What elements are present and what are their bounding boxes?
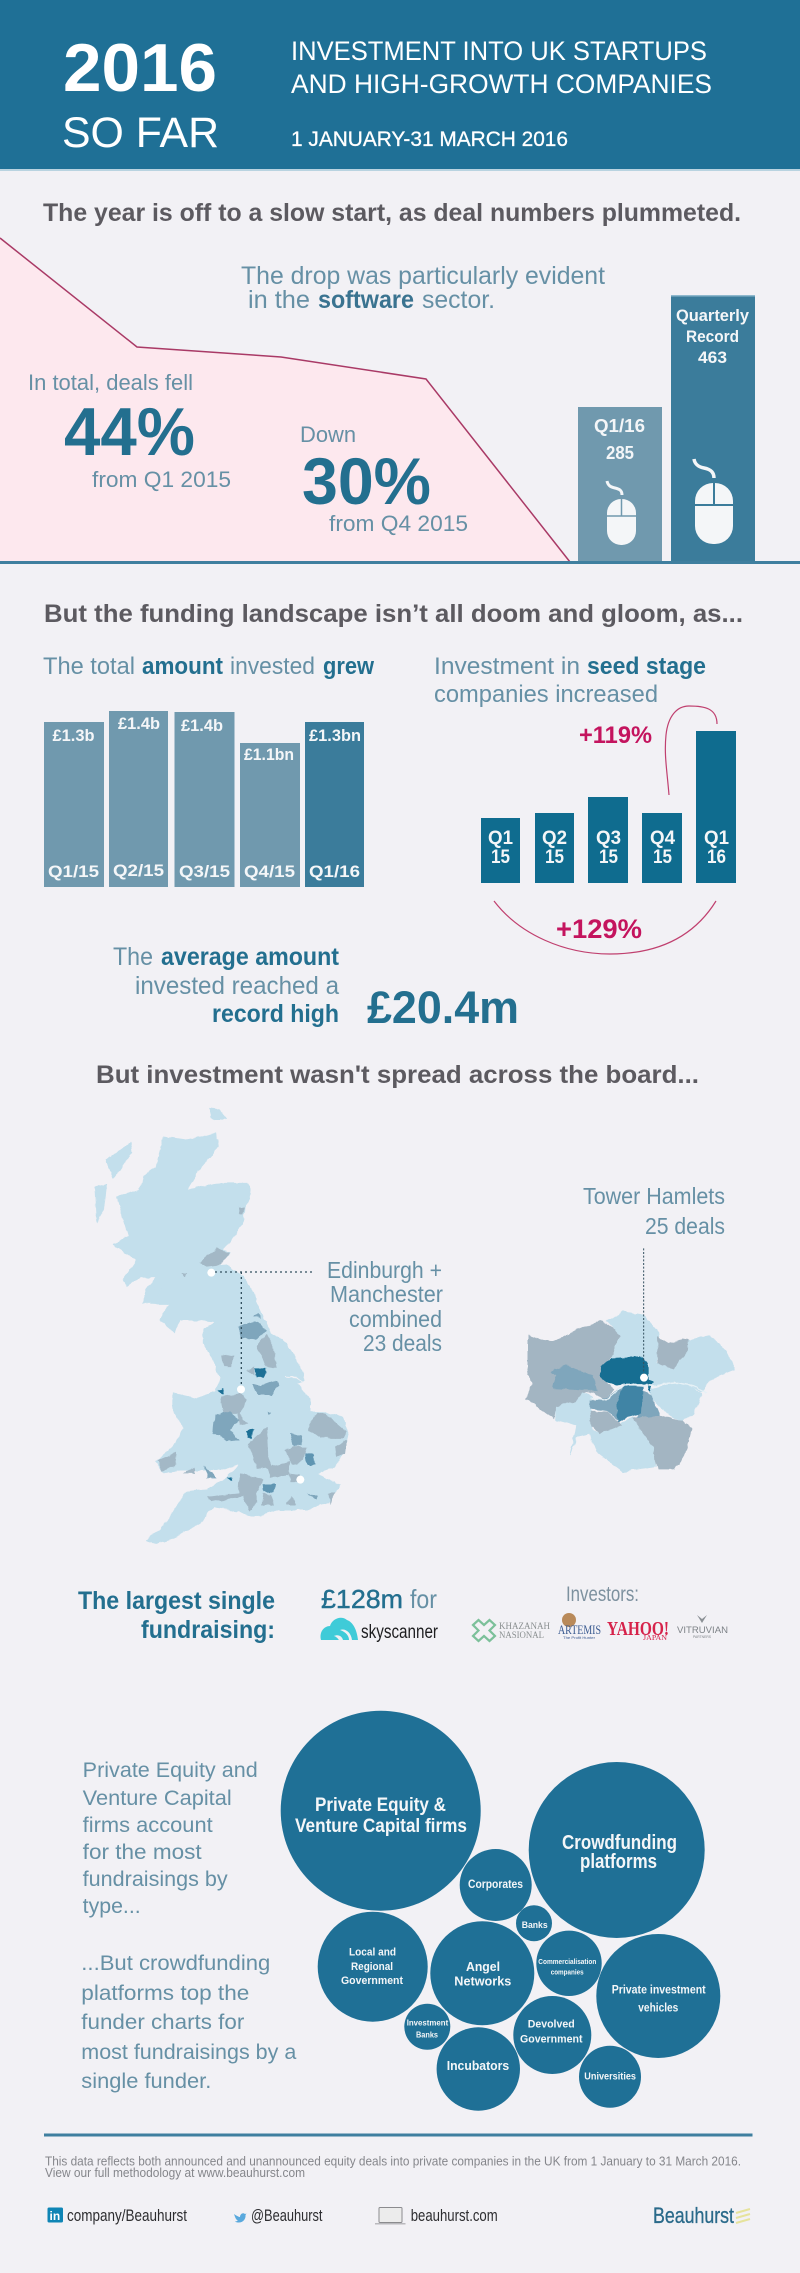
footer rule: [44, 2134, 752, 2136]
arrow: +119% growth curve: [579, 706, 717, 795]
arrow: +119% growth curve: +119%: [579, 722, 652, 749]
bubble labels: Regional: [351, 1961, 393, 1973]
bar chart: amount invested: £1.1bn: [244, 745, 294, 764]
logo: skyscanner: skyscanner: [361, 1622, 439, 1643]
text: private equity and crowdfunding explanation: for the most: [83, 1841, 202, 1864]
bar chart: seed stage: Q1: [488, 828, 513, 849]
header banner: [0, 0, 800, 171]
logo: Khazanah Nasional: KHAZANAH: [499, 1622, 550, 1632]
bubble labels: Government: [520, 2033, 583, 2045]
heading: funding landscape: But the funding landscape isn’t all doom and gloom, as...: [44, 600, 743, 628]
title: 2016 so far: [62, 30, 219, 157]
bar chart: seed stage: 16: [707, 847, 726, 868]
callout: deals fell 44%: from Q1 2015: [92, 467, 231, 492]
text: largest single fundraising: fundraising:: [141, 1616, 275, 1644]
bar chart: seed stage: [481, 731, 736, 883]
bubble labels: companies: [551, 1967, 584, 1976]
bubble labels: Private investment: [612, 1984, 706, 1996]
callout: down 30%: from Q4 2015: [329, 511, 468, 536]
social: Twitter: @Beauhurst: [251, 2206, 323, 2225]
heading: investment spread: But investment wasn't spread across the board...: [96, 1061, 699, 1089]
bar: quarterly record: Quarterly: [676, 306, 750, 325]
text: seed stage increased: [434, 653, 706, 708]
text: software drop: sector.: [422, 286, 495, 314]
social: LinkedIn: in: [50, 2209, 60, 2223]
bar: quarterly record: [671, 295, 755, 561]
bar chart: amount invested: Q4/15: [244, 862, 295, 881]
label: Edinburgh and Manchester: [327, 1257, 443, 1356]
text: total amount invested grew: grew: [323, 653, 374, 680]
bubble labels: platforms: [580, 1851, 657, 1873]
text: software drop: The drop was particularly evident: [241, 262, 605, 290]
bar chart: amount invested: Q3/15: [179, 862, 230, 881]
bubble labels: Corporates: [468, 1879, 523, 1891]
text: private equity and crowdfunding explanation: most fundraisings by a: [81, 2041, 297, 2064]
subtitle: AND HIGH-GROWTH COMPANIES: [291, 69, 712, 99]
text: £128m for: [321, 1584, 437, 1614]
label: Tower Hamlets: Tower Hamlets: [583, 1183, 725, 1209]
bubble labels: Incubators: [447, 2059, 509, 2073]
arrow: +129% growth curve: [494, 901, 716, 954]
logo: Artemis: The Profit Hunter: [563, 1635, 596, 1640]
text: total amount invested grew: [43, 653, 374, 680]
callout: average amount record high: invested reached a: [135, 972, 339, 1000]
label: Tower Hamlets: [583, 1183, 725, 1239]
callout: average amount record high: [113, 943, 519, 1033]
bar chart: seed stage: 15: [599, 847, 618, 868]
text: seed stage increased: companies increased: [434, 681, 658, 708]
chart: falling deal numbers area: [0, 238, 800, 564]
social: Twitter: [234, 2206, 323, 2225]
callout: average amount record high: average amount: [161, 943, 340, 971]
icon: mouse large: [694, 459, 733, 544]
logo: Vitruvian: VITRUVIAN: [677, 1625, 728, 1636]
text: seed stage increased: Investment in: [434, 653, 580, 680]
icon: mouse small: [607, 481, 636, 545]
bubble labels: Venture Capital firms: [295, 1816, 467, 1837]
logo: Beauhurst: Beauhurst: [653, 2203, 734, 2228]
map: United Kingdom: [95, 1108, 348, 1543]
bar chart: seed stage: Q4: [650, 828, 675, 849]
text: software drop: software: [318, 286, 414, 314]
title: 2016 so far: SO FAR: [62, 109, 219, 157]
callout: deals fell 44%: [28, 370, 231, 492]
text: methodology note: [45, 2154, 741, 2180]
bubble chart: funders: [281, 1711, 720, 2111]
bar chart: amount invested: [44, 711, 364, 887]
bar: Q1/16 software deals: [578, 407, 662, 561]
bubble labels: Universities: [584, 2071, 636, 2082]
text: private equity and crowdfunding explanation: [81, 1759, 297, 2093]
label: Edinburgh and Manchester: combined: [349, 1306, 442, 1332]
bar chart: seed stage: 15: [545, 847, 564, 868]
text: total amount invested grew: invested: [230, 653, 315, 680]
text: total amount invested grew: The total: [43, 653, 135, 680]
arrow: +129% growth curve: +129%: [556, 914, 642, 944]
logo: Khazanah Nasional: [473, 1620, 550, 1641]
bubble labels: Crowdfunding: [562, 1832, 677, 1854]
logo: Artemis: [558, 1613, 601, 1640]
bar chart: amount invested: Q2/15: [113, 861, 164, 880]
label: Edinburgh and Manchester: 23 deals: [363, 1330, 442, 1356]
bar chart: amount invested: £1.3bn: [309, 726, 361, 745]
bar chart: seed stage: Q1: [704, 828, 729, 849]
bubble labels: Commercialisation: [538, 1957, 597, 1966]
bubble labels: [295, 1795, 706, 2082]
heading: slow start: The year is off to a slow start, as deal numbers plummeted.: [43, 199, 741, 227]
bar: Q1/16 software deals: Q1/16: [594, 416, 645, 436]
bubble labels: vehicles: [638, 2003, 678, 2015]
callout: average amount record high: The: [113, 943, 153, 971]
bar chart: amount invested: £1.3b: [52, 726, 94, 745]
text: largest single fundraising: [78, 1587, 275, 1644]
callout: average amount record high: £20.4m: [367, 982, 519, 1033]
text: methodology note: This data reflects both announced and unannounced equity deals into private companies in the UK from 1 January to 31 March 2016.: [45, 2154, 741, 2169]
text: private equity and crowdfunding explanation: funder charts for: [81, 2011, 244, 2034]
bubble labels: Investment: [407, 2018, 449, 2027]
text: private equity and crowdfunding explanation: Private Equity and: [83, 1759, 258, 1782]
callout: deals fell 44%: 44%: [64, 394, 195, 470]
bubble labels: Devolved: [528, 2019, 575, 2031]
text: software drop: in the: [248, 286, 310, 314]
text: investors: Investors:: [566, 1583, 639, 1606]
bar chart: amount invested: £1.4b: [181, 716, 223, 735]
text: private equity and crowdfunding explanation: single funder.: [81, 2070, 211, 2093]
label: Edinburgh and Manchester: Manchester: [330, 1281, 443, 1307]
logo: Yahoo Japan: YAHOO!: [607, 1618, 669, 1640]
label: Edinburgh and Manchester: Edinburgh +: [327, 1257, 442, 1283]
bubble labels: Local and: [349, 1947, 396, 1959]
logo: skyscanner: [321, 1618, 439, 1643]
callout: down 30%: [300, 422, 468, 536]
social: LinkedIn: company/Beauhurst: [67, 2206, 187, 2225]
text: private equity and crowdfunding explanation: type...: [83, 1895, 141, 1918]
callout: deals fell 44%: In total, deals fell: [28, 370, 193, 395]
bar chart: amount invested: Q1/16: [309, 862, 360, 881]
title: 2016 so far: 2016: [63, 30, 217, 106]
text: private equity and crowdfunding explanation: Venture Capital: [83, 1787, 232, 1810]
bar chart: seed stage: 15: [653, 847, 672, 868]
logo: Vitruvian: PARTNERS: [693, 1635, 712, 1639]
bubble labels: Banks: [522, 1920, 548, 1931]
logo: Yahoo Japan: JAPAN: [643, 1633, 668, 1642]
social: website: beauhurst.com: [411, 2206, 498, 2225]
text: total amount invested grew: amount: [142, 653, 223, 680]
social: website: [375, 2206, 498, 2225]
bubble labels: Government: [341, 1975, 403, 1987]
callout: average amount record high: record high: [212, 1000, 339, 1028]
subtitle: [291, 36, 712, 151]
bar chart: seed stage: Q3: [596, 828, 621, 849]
text: private equity and crowdfunding explanation: ...But crowdfunding: [81, 1952, 270, 1975]
bar: quarterly record: Record: [686, 327, 739, 346]
text: software drop: [241, 262, 605, 314]
bubble labels: Banks: [416, 2030, 439, 2039]
bar: quarterly record: 463: [698, 348, 727, 367]
text: seed stage increased: seed stage: [587, 653, 706, 680]
text: £128m for: £128m: [321, 1584, 403, 1614]
text: private equity and crowdfunding explanation: fundraisings by: [83, 1868, 228, 1891]
subtitle: INVESTMENT INTO UK STARTUPS: [291, 36, 707, 66]
map: London boroughs: [526, 1248, 735, 1472]
text: private equity and crowdfunding explanation: firms account: [83, 1814, 213, 1837]
bar chart: seed stage: Q2: [542, 828, 567, 849]
label: Tower Hamlets: 25 deals: [645, 1213, 725, 1239]
bar: Q1/16 software deals: 285: [606, 443, 634, 463]
logo: Artemis: ARTEMIS: [558, 1622, 601, 1637]
text: private equity and crowdfunding explanation: platforms top the: [81, 1982, 249, 2005]
text: largest single fundraising: The largest single: [78, 1587, 275, 1615]
logo: Vitruvian: [677, 1615, 728, 1639]
bar chart: seed stage: 15: [491, 847, 510, 868]
subtitle: 1 JANUARY-31 MARCH 2016: [291, 128, 568, 151]
callout: down 30%: 30%: [302, 444, 431, 518]
callout: down 30%: Down: [300, 422, 356, 447]
text: £128m for: for: [410, 1584, 437, 1614]
bar chart: amount invested: £1.4b: [118, 714, 160, 733]
bar chart: amount invested: Q1/15: [48, 862, 99, 881]
bubble labels: Angel: [466, 1959, 500, 1974]
bubble labels: Private Equity &: [315, 1795, 446, 1816]
logo: Khazanah Nasional: NASIONAL: [499, 1631, 544, 1641]
text: methodology note: View our full methodology at www.beauhurst.com: [45, 2165, 305, 2180]
bubble labels: Networks: [454, 1974, 511, 1989]
